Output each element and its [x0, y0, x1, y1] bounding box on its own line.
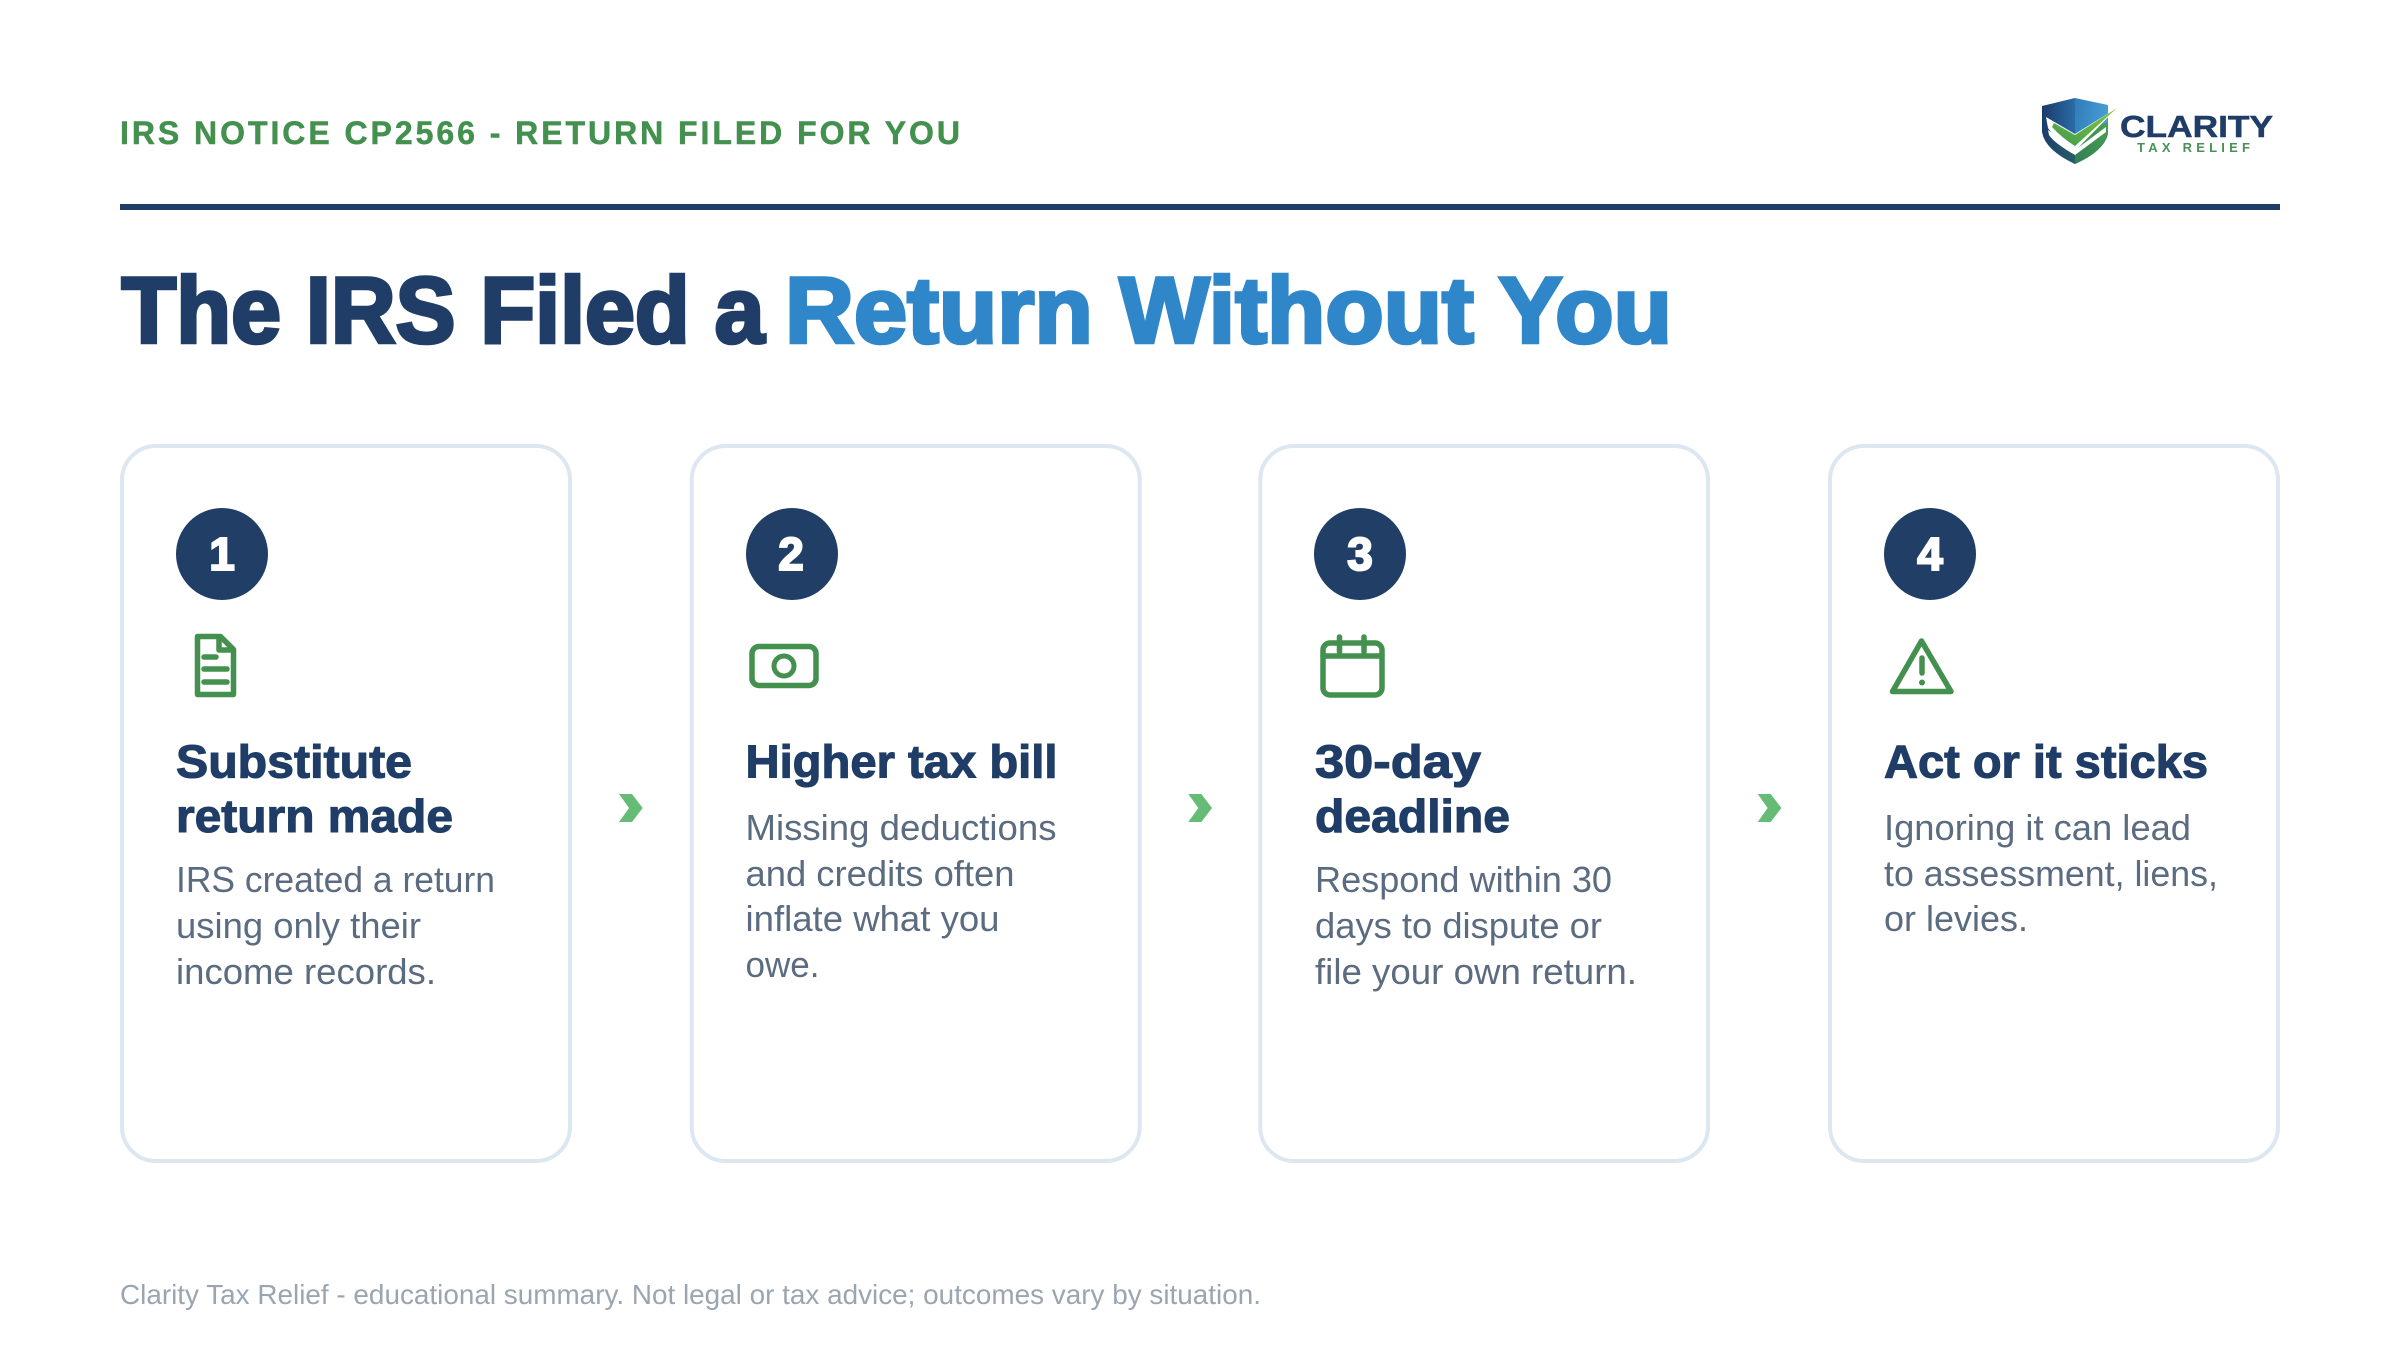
body text: [1315, 859, 1637, 992]
body text: [1884, 807, 2218, 939]
heading: 30-day deadline: [1315, 736, 1510, 842]
heading: Substitute return made: return made: [176, 790, 453, 842]
body text: using only their: [176, 905, 421, 946]
step number 2: [746, 508, 838, 600]
arrow 3: [1758, 794, 1781, 822]
body text: [746, 807, 1056, 985]
heading: 30-day deadline: deadline: [1315, 790, 1510, 842]
heading: 30-day deadline: 30-day: [1315, 736, 1481, 788]
body text: Respond within 30: [1315, 859, 1612, 900]
logo wordmark: CLARITY: [2120, 109, 2273, 144]
title: [122, 258, 1672, 362]
icon: banknote: [752, 646, 816, 686]
heading: Act or it sticks: Act or it sticks: [1884, 736, 2208, 788]
body text: or levies.: [1884, 898, 2028, 939]
header rule: [120, 204, 2280, 210]
footer disclaimer: Clarity Tax Relief - educational summary. Not legal or tax advice; outcomes vary by situation.: [120, 1279, 1261, 1310]
body text: to assessment, liens,: [1884, 853, 2218, 894]
heading: Higher tax bill: Higher tax bill: [746, 736, 1058, 788]
logo shield icon: [2042, 98, 2117, 164]
step number 4: 4: [1917, 528, 1943, 580]
logo tagline: TAX RELIEF: [2137, 140, 2250, 155]
eyebrow label: IRS NOTICE CP2566 - RETURN FILED FOR YOU: [120, 115, 960, 151]
body text: IRS created a return: [176, 859, 495, 900]
icon: warning triangle: [1892, 641, 1951, 692]
body text: days to dispute or: [1315, 905, 1602, 946]
icon: document: [198, 636, 234, 694]
body text: and credits often: [746, 853, 1014, 894]
step number 1: [176, 508, 268, 600]
title blue part: Return Without You: [785, 258, 1672, 362]
arrow 1: [619, 794, 643, 822]
step number 3: [1314, 508, 1406, 600]
panel: step 4: [1830, 446, 2278, 1161]
panel: step 2: [692, 446, 1140, 1161]
step number 1: 1: [209, 528, 235, 580]
body text: inflate what you: [746, 898, 1000, 939]
body text: [176, 859, 495, 992]
body text: file your own return.: [1315, 951, 1637, 992]
body text: owe.: [746, 944, 820, 985]
logo: Clarity Tax Relief: [2042, 98, 2273, 164]
body text: Missing deductions: [746, 807, 1056, 848]
panel: step 3: [1260, 446, 1708, 1161]
arrow 2: [1188, 794, 1212, 822]
body text: Ignoring it can lead: [1884, 807, 2191, 848]
step number 4: [1884, 508, 1976, 600]
step number 3: 3: [1347, 528, 1373, 580]
heading: Substitute return made: [176, 736, 453, 842]
title navy part: The IRS Filed a: [122, 258, 765, 362]
step number 2: 2: [778, 528, 804, 580]
icon: calendar: [1323, 637, 1382, 695]
heading: Substitute return made: Substitute: [176, 736, 412, 788]
panel: step 1: [122, 446, 570, 1161]
body text: income records.: [176, 951, 436, 992]
